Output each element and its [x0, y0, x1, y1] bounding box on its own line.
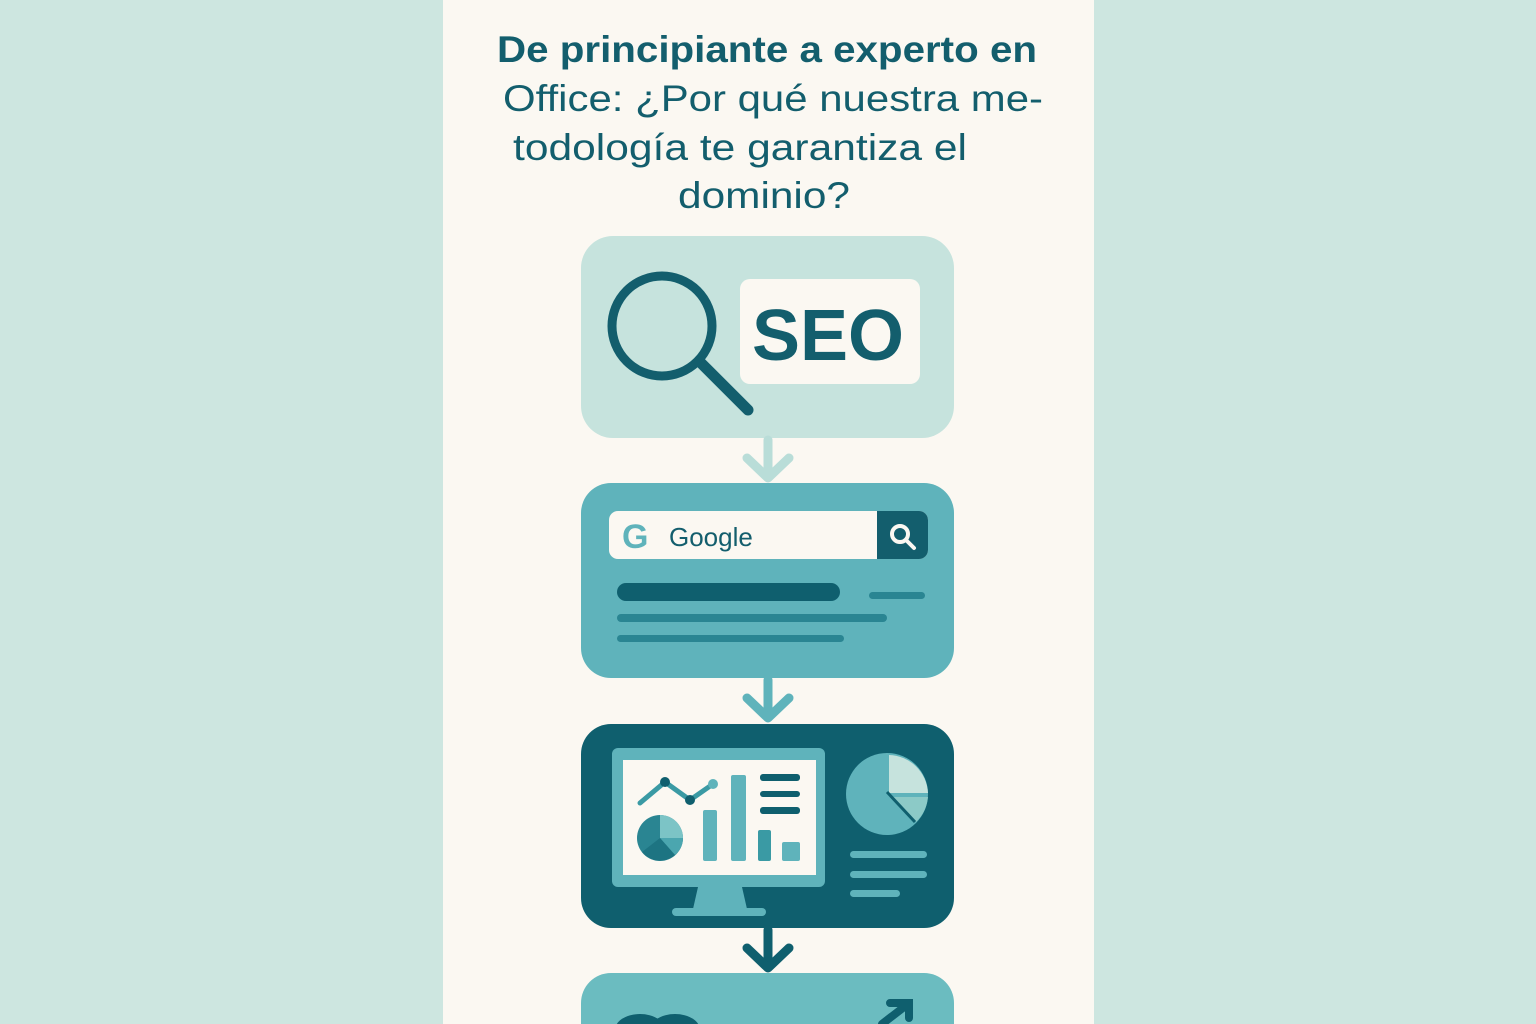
center panel	[443, 0, 1094, 1024]
arrow 2	[747, 680, 789, 718]
icon: magnifier	[612, 276, 748, 410]
panel: SEO	[581, 236, 954, 438]
panel: Google search: G	[622, 518, 648, 556]
panel: bottom	[581, 973, 954, 1024]
arrow 3	[747, 930, 789, 968]
icon: search	[892, 526, 914, 548]
panel: dashboard	[581, 724, 954, 928]
title	[497, 29, 1043, 216]
line chart	[640, 777, 718, 805]
small pie	[637, 815, 683, 861]
big pie	[846, 753, 928, 835]
panel: Google search: Google	[669, 522, 753, 552]
title: dominio?	[678, 175, 850, 216]
title: Office: ¿Por qué nuestra me-	[503, 78, 1043, 119]
SEO text: SEO	[752, 296, 904, 376]
title: todología te garantiza el	[513, 127, 967, 168]
bars	[703, 775, 800, 861]
title: De principiante a experto en	[497, 29, 1037, 70]
panel: Google search	[581, 483, 954, 678]
arrow 1	[747, 440, 789, 478]
